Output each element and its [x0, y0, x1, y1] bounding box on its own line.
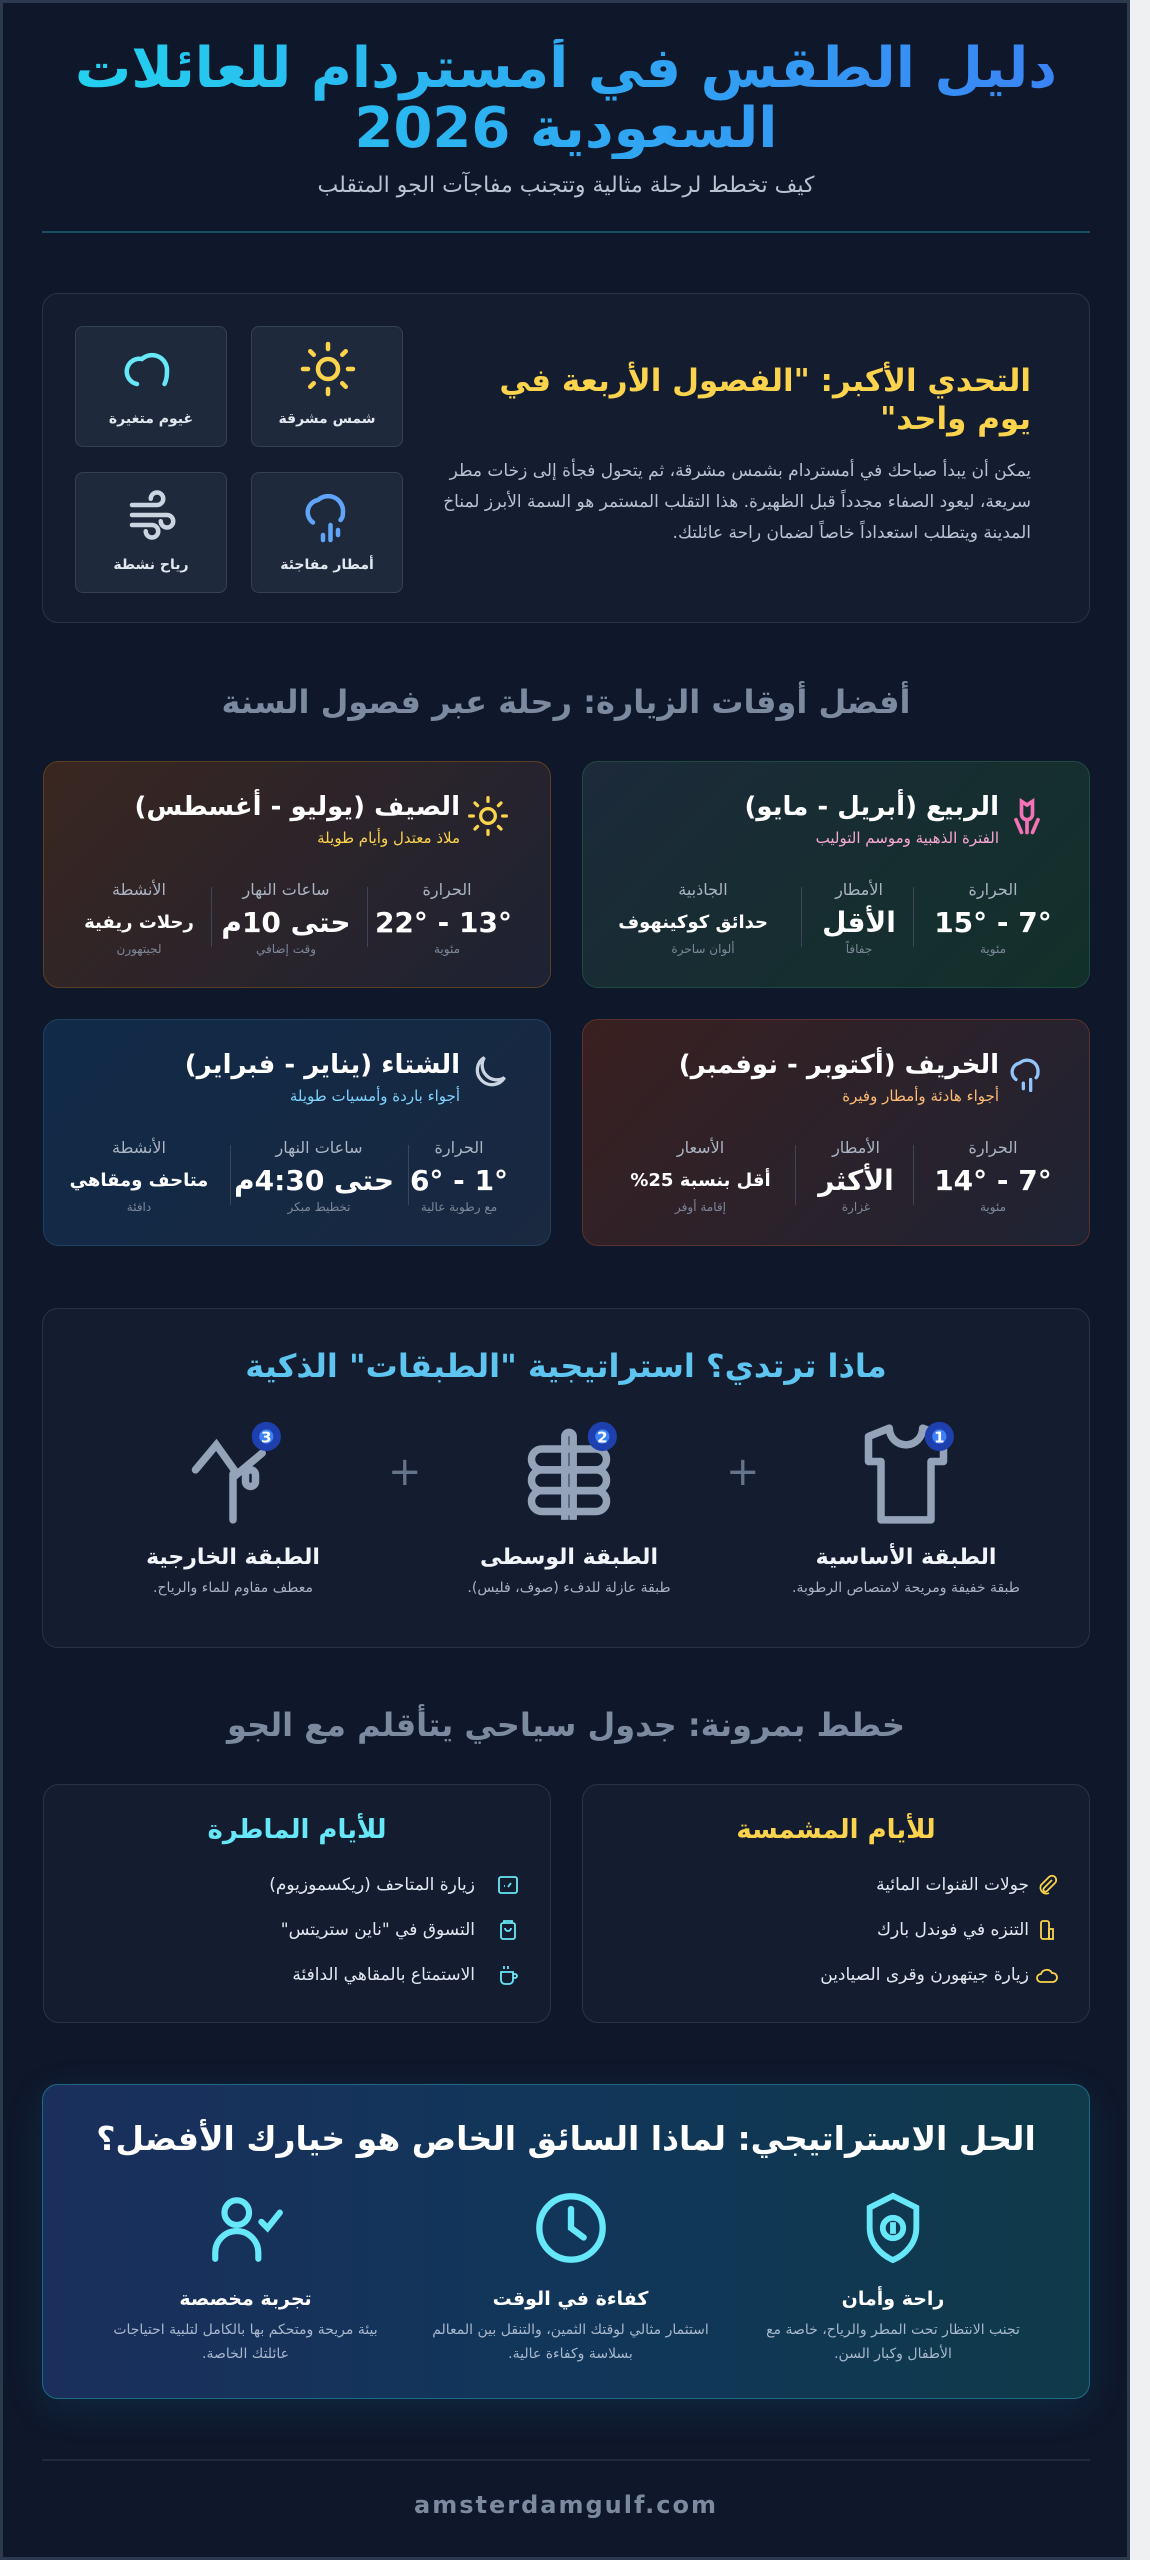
icon: moon	[476, 1056, 506, 1086]
card: summer: الأنشطة	[112, 880, 166, 899]
card: spring: جفافاً	[846, 942, 872, 956]
card: autumn: الحرارة	[968, 1138, 1018, 1157]
benefit: personalized: تجربة مخصصة	[179, 2288, 312, 2310]
plus: +	[726, 1449, 760, 1495]
card: winter: مع رطوبة عالية	[421, 1200, 497, 1214]
title	[43, 39, 1089, 159]
icon tile: cloud	[75, 326, 227, 447]
card: summer: وقت إضافي	[256, 942, 316, 956]
card: winter: دافئة	[127, 1200, 151, 1214]
item: museums: زيارة المتاحف (ريكسموزيوم)	[269, 1875, 475, 1895]
card: spring: الربيع (أبريل - مايو)	[745, 792, 999, 822]
item: cafes: الاستمتاع بالمقاهي الدافئة	[292, 1965, 475, 1985]
icon tile: cloud: غيوم متغيرة	[109, 411, 193, 427]
item: villages: زيارة جيتهورن وقرى الصيادين	[820, 1965, 1029, 1985]
layer 3: معطف مقاوم للماء والرياح.	[153, 1580, 313, 1596]
benefit: safety: تجنب الانتظار تحت المطر والرياح، خاصة مع الأطفال وكبار السن.	[766, 2322, 1020, 2362]
card: winter: الشتاء (يناير - فبراير)	[185, 1050, 460, 1080]
card: sunny days	[582, 1784, 1090, 2023]
card: summer	[43, 761, 551, 988]
card: winter: متاحف ومقاهي	[70, 1170, 208, 1191]
card: autumn: الخريف (أكتوبر - نوفمبر)	[679, 1050, 999, 1080]
card: spring: مئوية	[980, 942, 1006, 956]
card: autumn	[582, 1019, 1090, 1246]
card: summer: ساعات النهار	[242, 880, 329, 899]
card: sunny days: للأيام المشمسة	[736, 1815, 936, 1845]
benefit: time	[432, 2193, 709, 2362]
item: shopping: التسوق في "ناين ستريتس"	[281, 1920, 475, 1940]
card: summer: الصيف (يوليو - أغسطس)	[134, 792, 460, 822]
card: summer: رحلات ريفية	[84, 912, 194, 933]
plus: +	[388, 1449, 422, 1495]
layers heading: ماذا ترتدي؟ استراتيجية "الطبقات" الذكية	[245, 1347, 887, 1385]
challenge heading: التحدي الأكبر: "الفصول الأربعة في يوم واحد"	[499, 363, 1031, 437]
icon: t-shirt	[864, 1422, 954, 1524]
card: autumn: 7° - 14°	[934, 1164, 1052, 1197]
card: summer: الحرارة	[422, 880, 472, 899]
subtitle: كيف تخطط لرحلة مثالية وتتجنب مفاجآت الجو المتقلب	[318, 173, 814, 198]
card: spring: الأقل	[822, 906, 896, 939]
panel: private driver	[42, 2084, 1090, 2399]
title: السعودية 2026	[354, 96, 778, 161]
icon tile: sun: شمس مشرقة	[278, 411, 376, 427]
icon: tulip	[1014, 798, 1040, 834]
card: autumn: الأمطار	[832, 1138, 880, 1157]
card: spring	[582, 761, 1090, 988]
card: summer: 13° - 22°	[375, 906, 512, 939]
icon tile: sun	[251, 326, 403, 447]
icon: jacket hanger: 3	[261, 1428, 272, 1446]
layer 3	[146, 1422, 320, 1596]
icon: sun	[468, 796, 508, 836]
title: دليل الطقس في أمستردام للعائلات	[75, 36, 1057, 101]
card: winter	[43, 1019, 551, 1246]
layer 1: الطبقة الأساسية	[816, 1545, 996, 1570]
benefit: safety	[766, 2192, 1020, 2362]
challenge paragraph: يمكن أن يبدأ صباحك في أمستردام بشمس مشرقة، ثم يتحول فجأة إلى زخات مطر سريعة، ليعود الصفاء مجدداً قبل الظهيرة. هذا التقلب المستمر هو السمة الأبرز لمناخ المدينة ويتطلب استعداداً خاصاً لضمان راحة عائلتك.	[443, 461, 1031, 543]
icon: sweater	[528, 1422, 617, 1520]
layer 2: طبقة عازلة للدفء (صوف، فليس).	[467, 1580, 671, 1596]
benefit: personalized: بيئة مريحة ومتحكم بها بالكامل لتلبية احتياجات عائلتك الخاصة.	[113, 2322, 378, 2362]
layer 1: طبقة خفيفة ومريحة لامتصاص الرطوبة.	[792, 1580, 1020, 1596]
card: summer: حتى 10م	[221, 906, 351, 939]
icon: t-shirt: 1	[934, 1428, 945, 1446]
card: winter: أجواء باردة وأمسيات طويلة	[290, 1087, 460, 1105]
card: spring: حدائق كوكينهوف	[618, 912, 768, 933]
footer domain: amsterdamgulf.com	[414, 2491, 718, 2519]
card: autumn: إقامة أوفر	[675, 1200, 726, 1214]
card: spring: الجاذبية	[678, 880, 728, 899]
card: summer: لجيتهورن	[116, 942, 161, 956]
layer 2	[467, 1422, 671, 1596]
panel: challenge	[42, 293, 1090, 623]
benefit: safety: راحة وأمان	[842, 2288, 944, 2310]
layer 3: الطبقة الخارجية	[146, 1545, 320, 1570]
card: winter: حتى 4:30م	[234, 1164, 394, 1197]
card: winter: الأنشطة	[112, 1138, 166, 1157]
card: spring: الفترة الذهبية وموسم التوليب	[816, 829, 999, 847]
card: autumn: أقل بنسبة 25%	[630, 1170, 771, 1191]
layer 2: الطبقة الوسطى	[480, 1545, 658, 1570]
card: spring: 7° - 15°	[934, 906, 1052, 939]
section heading: seasons: أفضل أوقات الزيارة: رحلة عبر فصول السنة	[222, 683, 910, 721]
icon tile: rain: أمطار مفاجئة	[280, 557, 374, 573]
section heading: schedule: خطط بمرونة: جدول سياحي يتأقلم مع الجو	[227, 1706, 905, 1744]
driver heading: الحل الاستراتيجي: لماذا السائق الخاص هو خيارك الأفضل؟	[96, 2119, 1036, 2158]
card: autumn: الأسعار	[677, 1138, 724, 1157]
card: rainy days: للأيام الماطرة	[207, 1815, 387, 1845]
card: winter: ساعات النهار	[276, 1138, 362, 1157]
card: rainy days	[43, 1784, 551, 2023]
card: spring: الحرارة	[968, 880, 1018, 899]
panel: layers	[42, 1308, 1090, 1648]
card: autumn: الأكثر	[818, 1164, 894, 1197]
icon: rain cloud	[1010, 1058, 1040, 1092]
card: spring: الأمطار	[835, 880, 883, 899]
icon: sweater: 2	[597, 1428, 608, 1446]
icon: clock	[536, 2193, 606, 2263]
card: winter: الحرارة	[434, 1138, 484, 1157]
card: spring: ألوان ساحرة	[671, 942, 735, 956]
icon: user check	[212, 2197, 283, 2262]
card: winter: تخطيط مبكر	[287, 1200, 351, 1214]
icon tile: wind: رياح نشطة	[113, 557, 189, 573]
item: canals: جولات القنوات المائية	[876, 1875, 1029, 1895]
card: autumn: غزارة	[842, 1200, 870, 1214]
icon tile: wind	[75, 472, 227, 593]
benefit: time: كفاءة في الوقت	[493, 2288, 648, 2310]
card: summer: ملاذ معتدل وأيام طويلة	[317, 829, 460, 847]
card: autumn: أجواء هادئة وأمطار وفيرة	[842, 1087, 999, 1105]
layer 1	[792, 1422, 1020, 1596]
card: winter: 1° - 6°	[410, 1164, 508, 1197]
item: park: التنزه في فوندل بارك	[877, 1920, 1029, 1940]
card: summer: مئوية	[434, 942, 460, 956]
benefit: personalized	[113, 2197, 378, 2362]
benefit: time: استثمار مثالي لوقتك الثمين، والتنقل بين المعالم بسلاسة وكفاءة عالية.	[432, 2322, 709, 2362]
icon: jacket hanger	[192, 1422, 281, 1524]
icon tile: rain	[251, 472, 403, 593]
card: autumn: مئوية	[980, 1200, 1006, 1214]
icon: shield	[866, 2192, 920, 2264]
